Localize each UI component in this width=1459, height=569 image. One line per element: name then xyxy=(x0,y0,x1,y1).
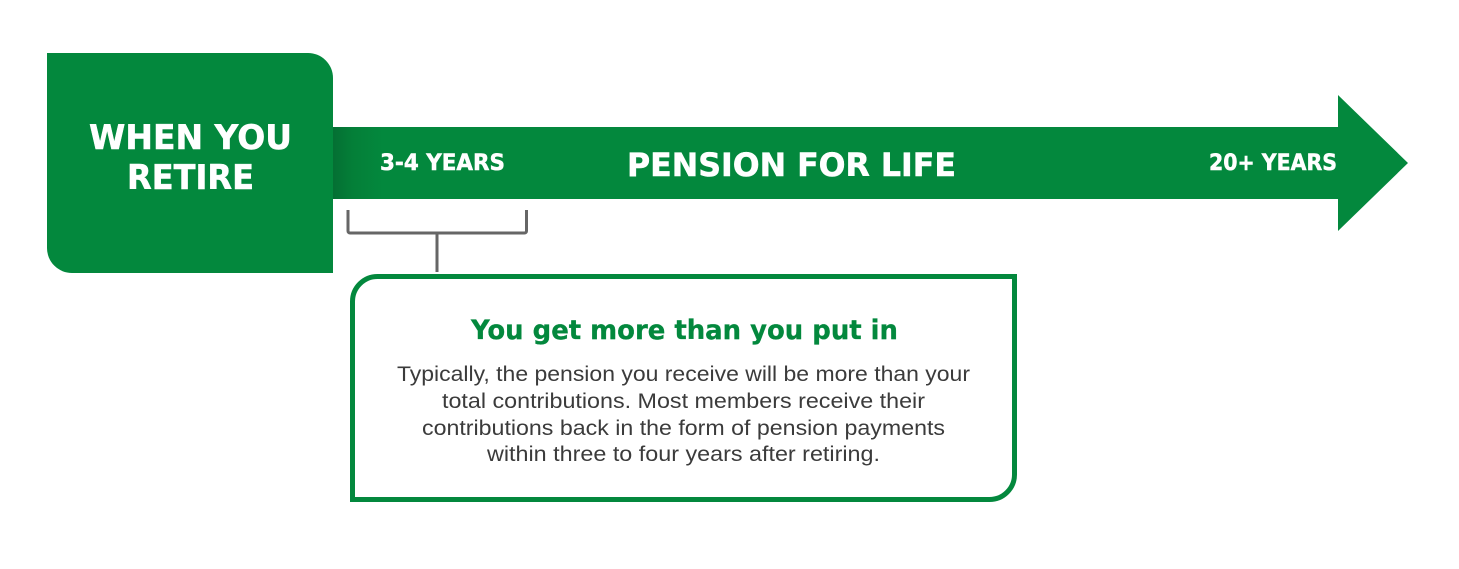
panel: when you retire xyxy=(47,53,333,273)
label: 3-4 years: 3-4 YEARS xyxy=(380,150,505,176)
heading: retire: RETIRE xyxy=(127,158,254,197)
heading: when you: WHEN YOU xyxy=(89,118,292,157)
callout panel xyxy=(352,276,1014,500)
callout body text: contributions back in the form of pension payments xyxy=(422,416,945,440)
label: pension for life: PENSION FOR LIFE xyxy=(627,146,956,184)
timeline arrow xyxy=(333,95,1408,231)
callout body text: total contributions. Most members receive their xyxy=(442,389,925,413)
label: 20+ years: 20+ YEARS xyxy=(1209,150,1337,176)
bracket connector xyxy=(348,210,526,272)
callout heading: You get more than you put in xyxy=(470,315,898,346)
callout body text: within three to four years after retiring. xyxy=(486,442,880,466)
callout body text xyxy=(397,362,970,466)
callout body text: Typically, the pension you receive will be more than your xyxy=(397,362,970,386)
